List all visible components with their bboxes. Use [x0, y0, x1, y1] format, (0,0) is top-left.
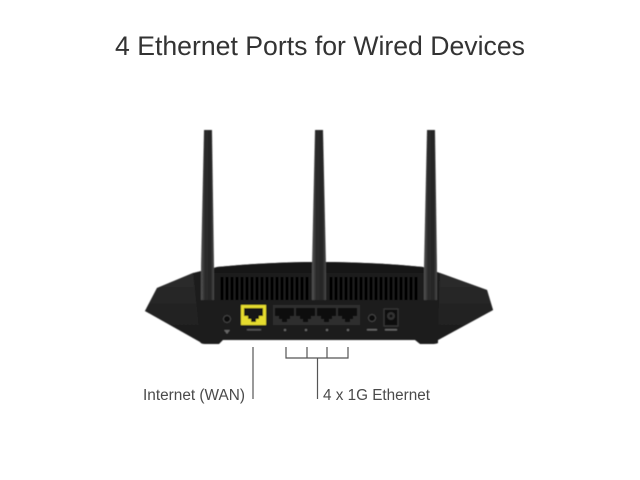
reset button [367, 314, 377, 330]
router [145, 130, 493, 344]
title: 4 Ethernet Ports for Wired Devices [115, 31, 525, 61]
right antenna [424, 130, 437, 300]
left vent [222, 277, 307, 300]
label: Internet (WAN): Internet (WAN) [143, 387, 245, 404]
wifi icon [224, 330, 230, 334]
WAN leader line [252, 347, 254, 399]
router body [145, 262, 493, 344]
internet port [241, 305, 266, 330]
right vent [331, 277, 416, 300]
label: 4 x 1G Ethernet: 4 x 1G Ethernet [323, 387, 431, 404]
wifi button [224, 316, 230, 322]
LAN ports [273, 305, 360, 330]
center antenna [312, 130, 326, 300]
left antenna [201, 130, 214, 300]
power jack [384, 309, 398, 330]
LAN bracket [286, 347, 348, 399]
